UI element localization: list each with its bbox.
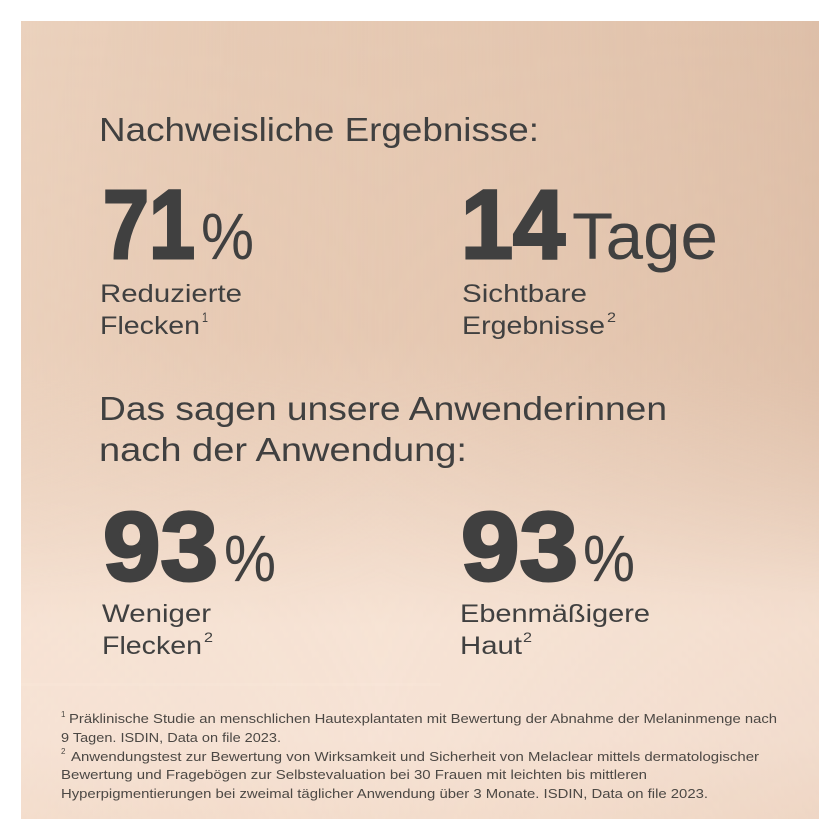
heading: what users say: Das sagen unsere Anwenderinnen	[99, 390, 667, 427]
stat: 93 percent more even skin: Ebenmäßigere	[460, 600, 650, 628]
stat: 14 days visible results: Tage	[572, 199, 718, 273]
heading: what users say	[99, 390, 667, 468]
stat: 93 percent more even skin: 93	[461, 492, 578, 601]
stat: 93 percent fewer spots: 93	[103, 492, 218, 601]
stat: 14 days visible results	[461, 170, 718, 340]
stat: 71 percent reduced spots: Flecken	[100, 312, 200, 340]
footnotes: 2	[61, 747, 66, 756]
stat: 71 percent reduced spots: 71	[103, 170, 195, 279]
stat: 93 percent fewer spots: 2	[204, 629, 213, 645]
stat: 14 days visible results: 2	[607, 309, 616, 325]
heading: what users say: nach der Anwendung:	[99, 431, 467, 468]
stat: 93 percent fewer spots	[102, 492, 276, 660]
stat: 93 percent more even skin: Haut	[460, 632, 522, 660]
stat: 71 percent reduced spots	[100, 170, 254, 340]
footnotes: 1	[61, 710, 66, 719]
stat: 14 days visible results: Ergebnisse	[462, 312, 605, 340]
stat: 93 percent fewer spots: %	[224, 521, 276, 595]
footnotes: Präklinische Studie an menschlichen Hautexplantaten mit Bewertung der Abnahme der Melaninmenge nach	[69, 711, 777, 726]
stat: 14 days visible results: Sichtbare	[462, 280, 587, 308]
stat: 14 days visible results: 14	[461, 170, 565, 279]
footnotes: Anwendungstest zur Bewertung von Wirksamkeit und Sicherheit von Melaclear mittels dermatologischer	[71, 749, 760, 764]
stat: 93 percent more even skin	[460, 492, 650, 660]
footnotes: Bewertung und Fragebögen zur Selbstevaluation bei 30 Frauen mit leichten bis mittleren	[61, 767, 647, 782]
stat: 93 percent more even skin: %	[583, 521, 635, 595]
footnotes: 9 Tagen. ISDIN, Data on file 2023.	[61, 730, 281, 745]
stat: 93 percent more even skin: 2	[523, 629, 532, 645]
stat: 93 percent fewer spots: Flecken	[102, 632, 202, 660]
stat: 93 percent fewer spots: Weniger	[102, 600, 211, 628]
stat: 71 percent reduced spots: Reduzierte	[100, 280, 242, 308]
footnotes	[61, 710, 777, 801]
heading: proven results: Nachweisliche Ergebnisse:	[99, 111, 539, 148]
stat: 71 percent reduced spots: %	[201, 199, 254, 273]
footnotes: Hyperpigmentierungen bei zweimal täglicher Anwendung über 3 Monate. ISDIN, Data on file 2023.	[61, 786, 708, 801]
stat: 71 percent reduced spots: 1	[202, 309, 208, 325]
